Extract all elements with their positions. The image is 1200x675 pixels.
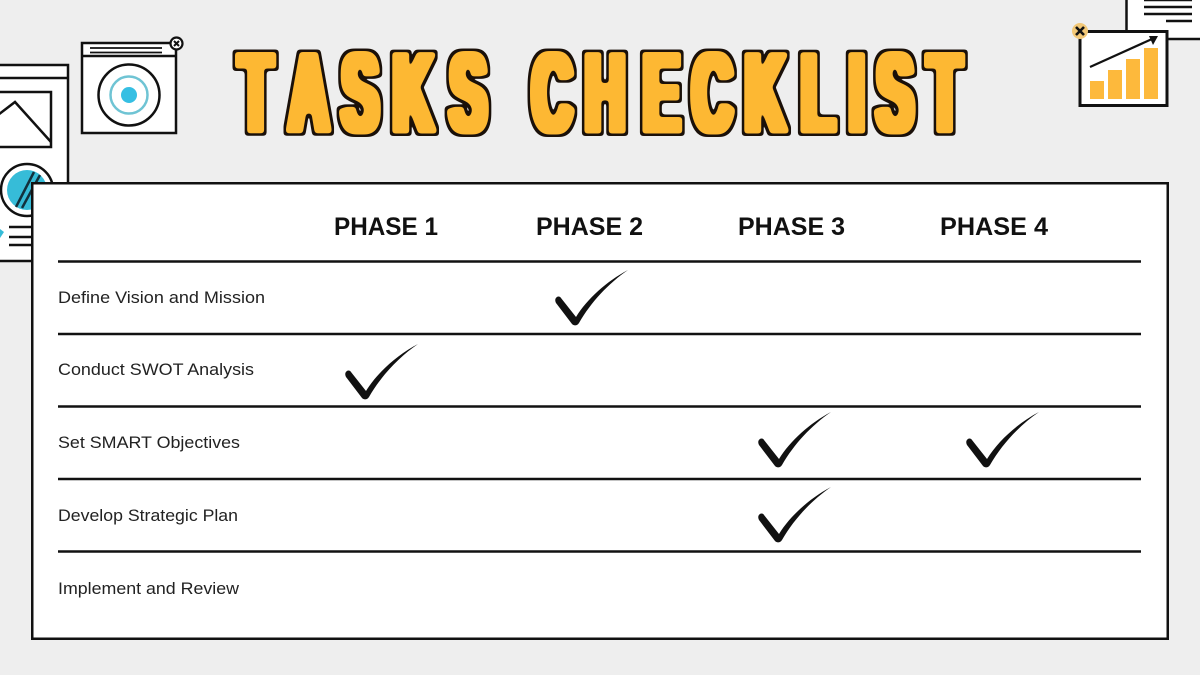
icon: growth chart window [1072,23,1167,106]
checkmark: SMART, phase 4 [966,412,1039,467]
chart bars [1090,48,1158,99]
task labels: Implement and Review [58,579,240,598]
task labels: Develop Strategic Plan [58,506,238,525]
task labels [58,288,265,598]
checkmark: Define Vision, phase 2 [555,270,628,325]
task labels: Set SMART Objectives [58,433,240,452]
title: TASKS CHECKLIST [239,30,961,156]
task labels: Conduct SWOT Analysis [58,360,254,379]
checkmark: Strategic Plan, phase 3 [758,487,831,542]
icon: target window [82,38,182,133]
checkmark: SWOT, phase 1 [345,344,418,399]
checkmark: SMART, phase 3 [758,412,831,467]
table header: phases: PHASE 4 [940,213,1048,241]
panel: checklist table [32,183,1168,639]
task labels: Define Vision and Mission [58,288,265,307]
table header: phases: PHASE 2 [536,213,643,241]
icon: left document page [0,65,68,261]
table header: phases [334,213,1048,241]
table header: phases: PHASE 3 [738,213,845,241]
table header: phases: PHASE 1 [334,213,438,241]
icon: top right document [1126,0,1200,39]
